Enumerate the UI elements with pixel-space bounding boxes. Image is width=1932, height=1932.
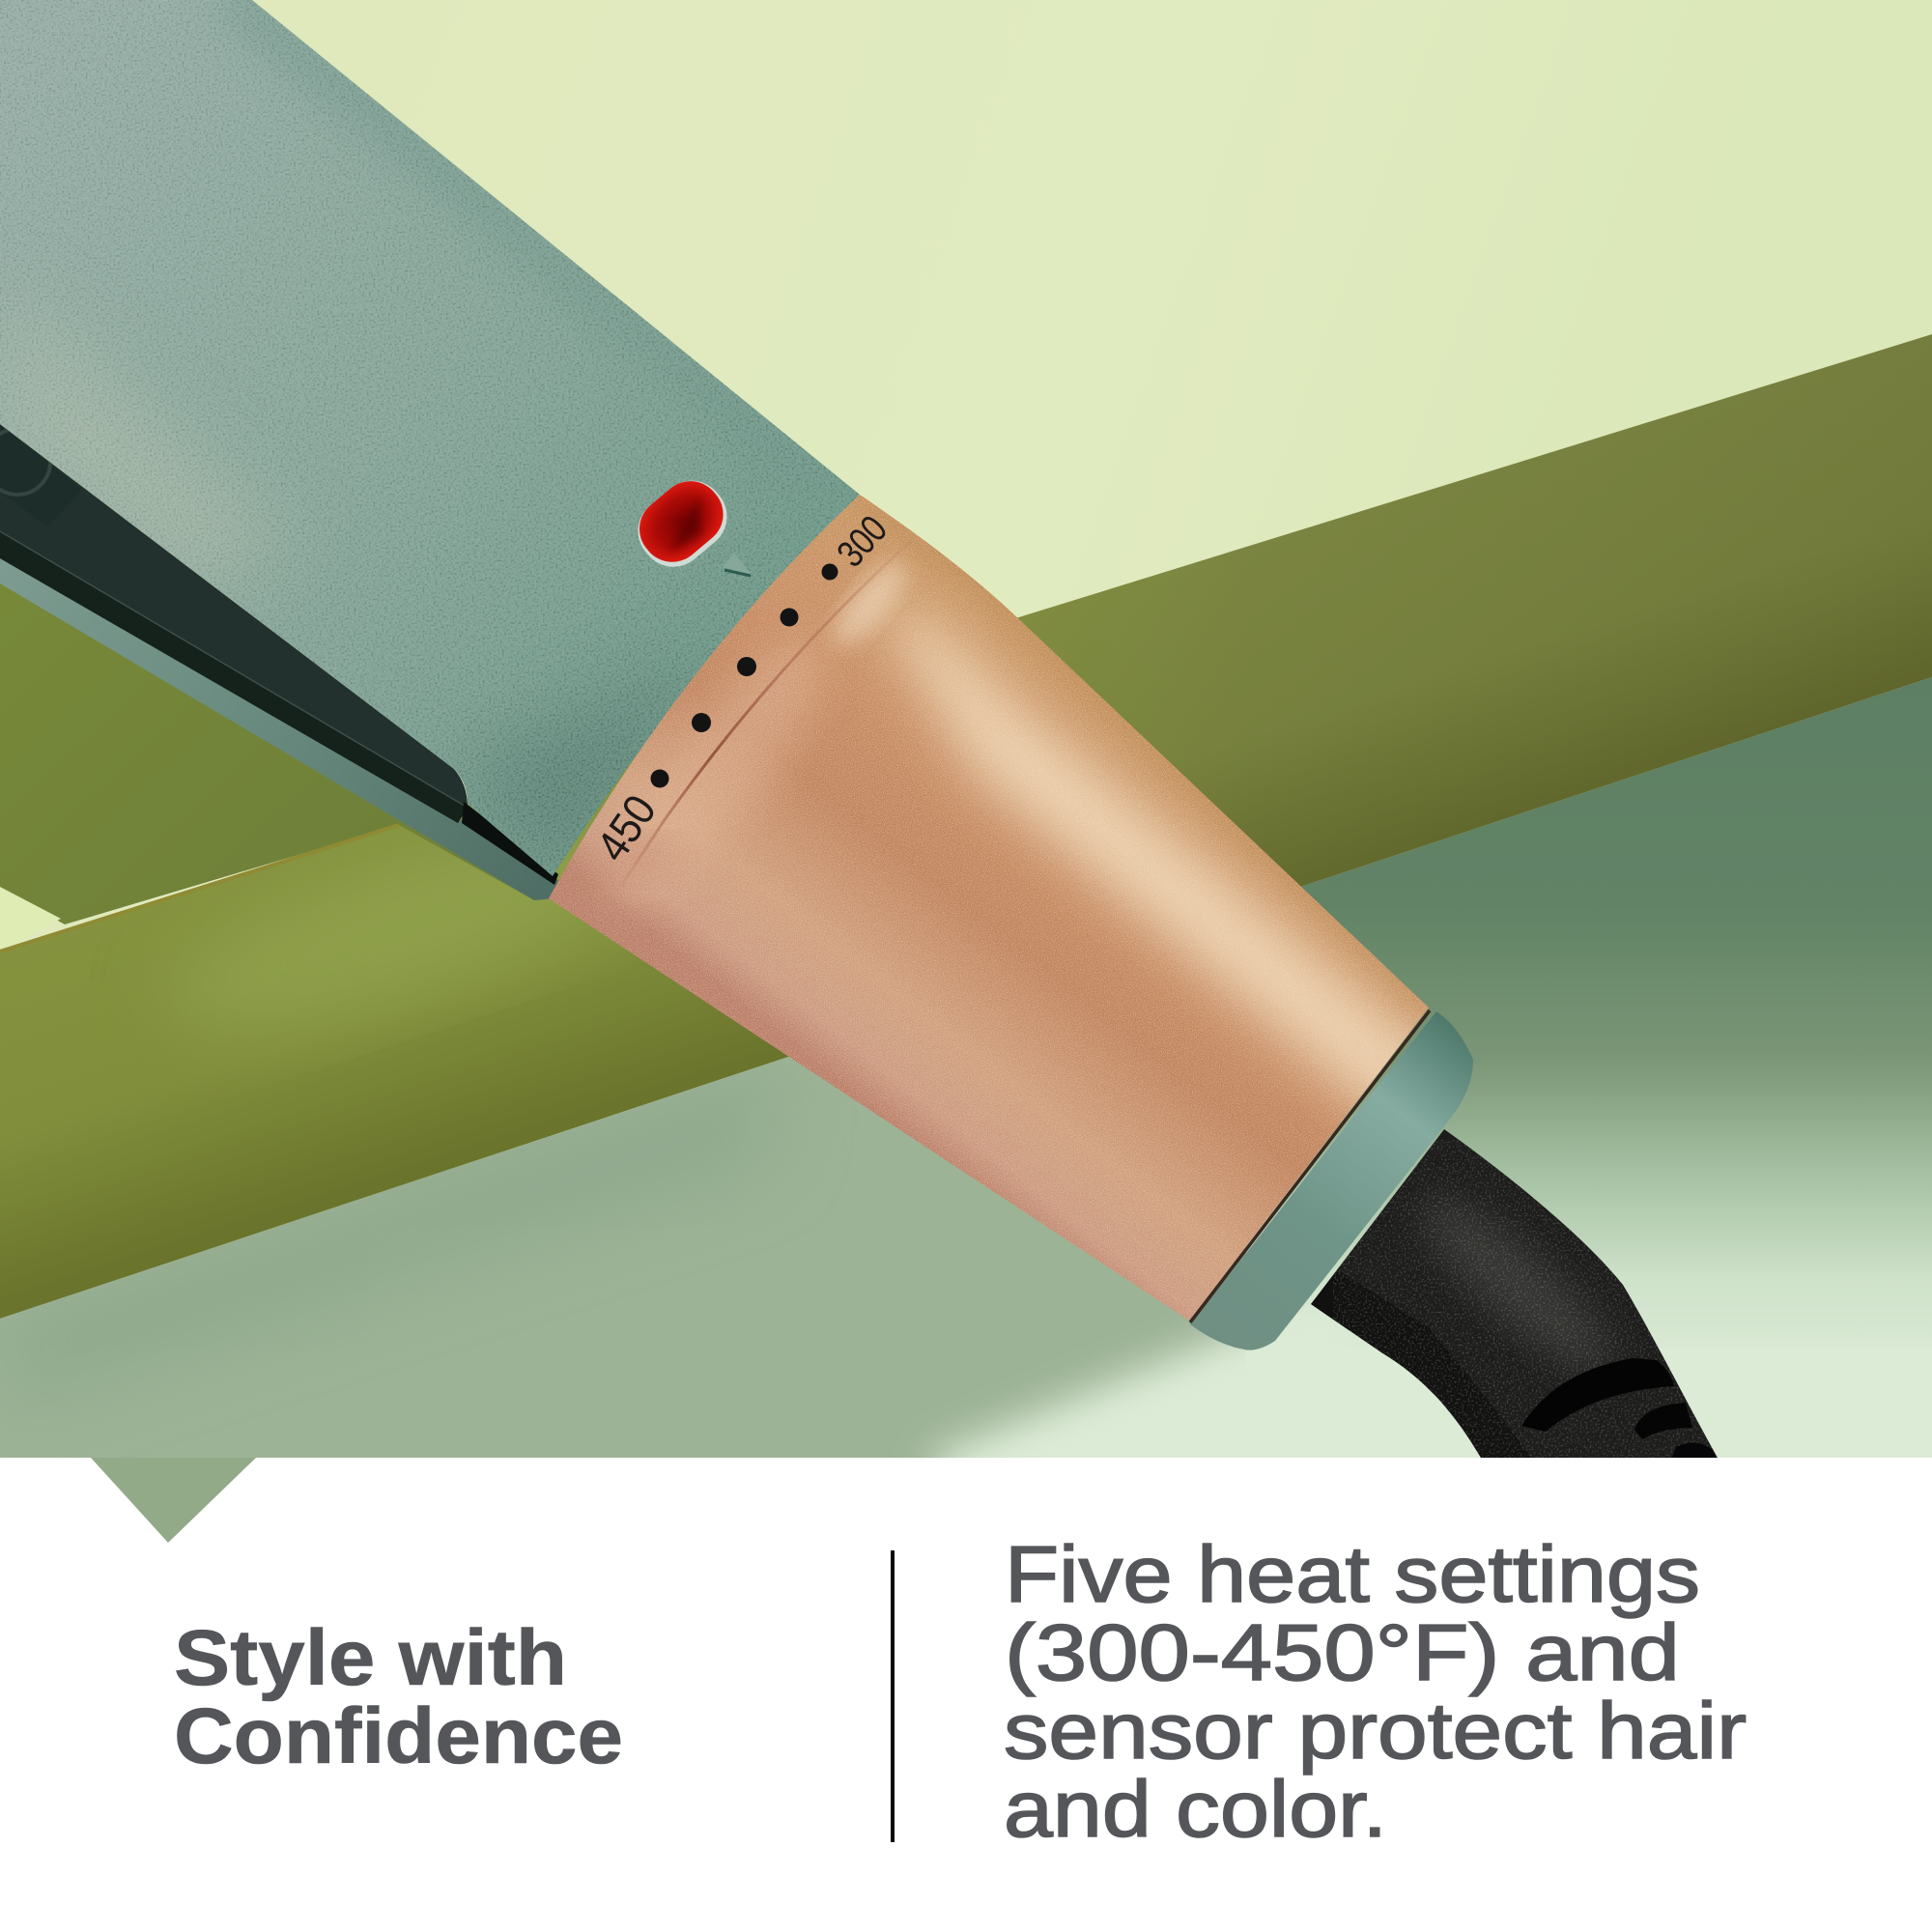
body text: sensor protect hair — [1004, 1686, 1747, 1776]
top surface of upper block — [0, 0, 1932, 966]
lower arm of the styler — [0, 558, 562, 900]
divider line — [891, 1550, 895, 1842]
dark plate with logo — [0, 424, 558, 885]
gold heat-dial sleeve — [541, 483, 1468, 1333]
black cord strain relief — [1304, 1121, 1719, 1463]
shadowed olive ledge left — [0, 580, 534, 924]
body text: Five heat settings — [1005, 1529, 1700, 1619]
bright sliver on ledge — [0, 887, 61, 952]
heat setting dial markings — [586, 508, 895, 870]
label 300: 300 — [829, 508, 895, 575]
body text — [1004, 1529, 1747, 1854]
white caption panel — [0, 1458, 1932, 1932]
olive front face of block — [0, 334, 1932, 1319]
dial dots — [651, 564, 838, 788]
pale green floor — [0, 667, 1932, 1507]
power button — [625, 468, 740, 581]
heading: Style with Confidence: Confidence — [174, 1692, 623, 1780]
indicator triangle — [723, 553, 752, 576]
green end cap — [1190, 1010, 1473, 1350]
heading: Style with Confidence — [174, 1614, 623, 1780]
green handle body — [0, 0, 869, 889]
body text: and color. — [1004, 1764, 1387, 1854]
label 450: 450 — [586, 785, 666, 870]
body text: (300-450°F) and — [1005, 1607, 1680, 1697]
heading: Style with Confidence: Style with — [174, 1614, 567, 1702]
photo: background surfaces — [0, 0, 1932, 1507]
callout pointer triangle — [91, 1458, 256, 1543]
